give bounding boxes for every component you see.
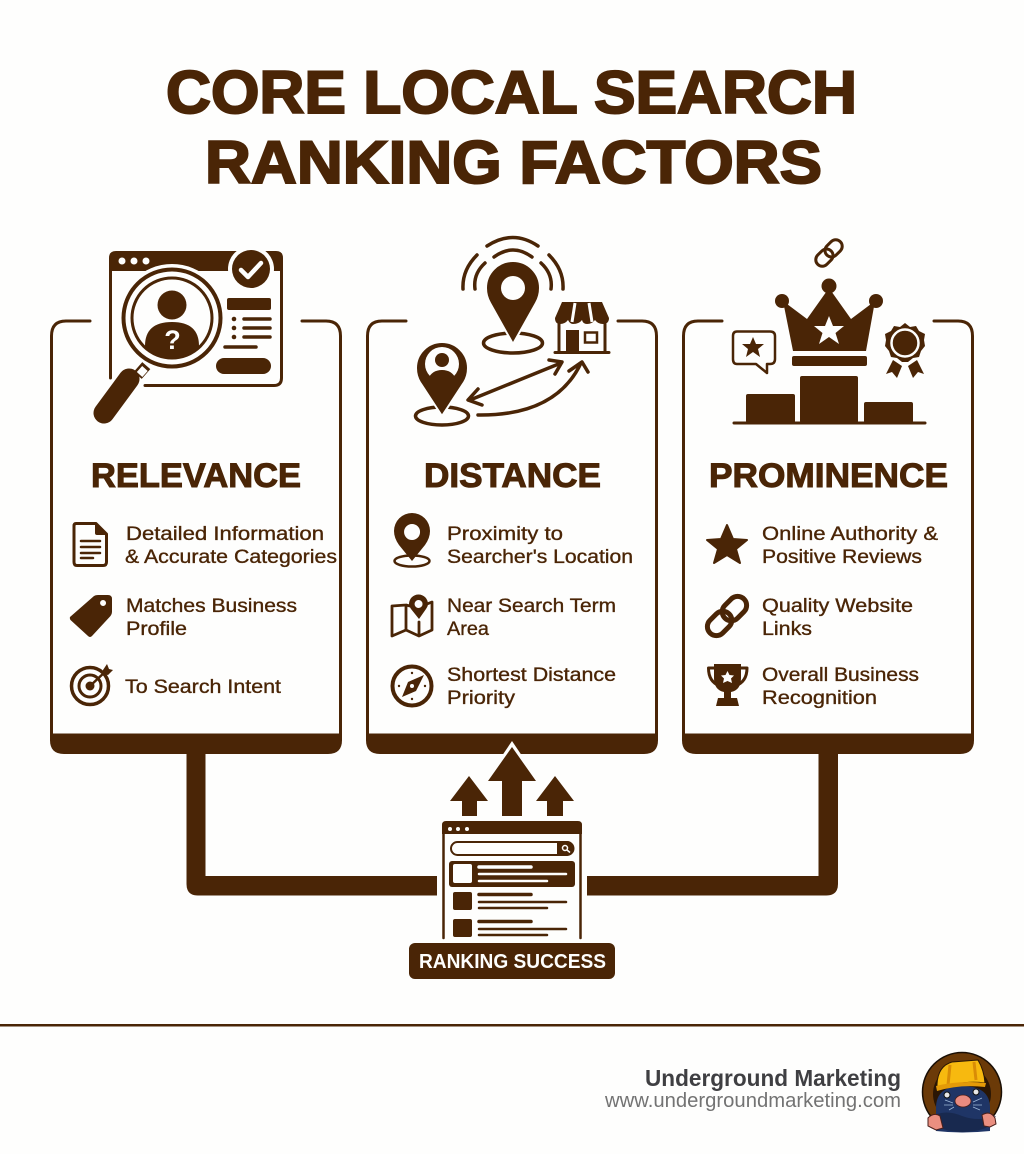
badge: ranking success: RANKING SUCCESS <box>419 951 606 973</box>
item: business recognition <box>708 664 919 709</box>
icon: mole mascot logo <box>922 1052 1002 1132</box>
item: matches business profile: Matches Business <box>126 595 297 617</box>
panel: prominence <box>682 237 974 754</box>
item: near search term <box>392 594 616 640</box>
item: proximity <box>394 513 633 568</box>
item: matches business profile <box>70 595 297 640</box>
icon: tag <box>70 595 112 637</box>
icon: map <box>392 594 432 636</box>
icon: compass <box>392 666 432 706</box>
item: detailed information <box>74 523 337 568</box>
item: search intent <box>72 664 282 704</box>
item: detailed information: Detailed Information <box>126 523 324 545</box>
heading: relevance: RELEVANCE <box>91 457 301 495</box>
item: near search term: Near Search Term <box>447 595 616 617</box>
card frame: prominence <box>682 321 974 754</box>
card frame: relevance <box>50 321 342 754</box>
title <box>166 59 857 196</box>
connector: right <box>587 750 838 896</box>
item: proximity: Searcher's Location <box>447 546 633 568</box>
item: quality links: Links <box>762 618 812 640</box>
icon: trophy <box>708 664 747 706</box>
heading: distance: DISTANCE <box>424 457 601 495</box>
item: near search term: Area <box>447 618 489 640</box>
title: CORE LOCAL SEARCH <box>166 59 857 126</box>
footer brand text: Underground Marketing <box>645 1065 901 1091</box>
icon: crown on podium <box>733 237 925 423</box>
panel: distance <box>366 238 658 754</box>
item: search intent: To Search Intent <box>125 676 282 698</box>
item: online authority: Online Authority & <box>762 523 938 545</box>
item: shortest distance: Shortest Distance <box>447 664 616 686</box>
icon: search results window <box>442 821 582 938</box>
item: shortest distance <box>392 664 616 709</box>
item: business recognition: Overall Business <box>762 664 919 686</box>
icon: star <box>707 525 747 563</box>
icon: location, store and routes <box>416 238 609 425</box>
icon: magnifier over profile window <box>104 246 283 413</box>
panel: relevance <box>50 246 342 754</box>
connector: left <box>186 750 437 896</box>
item: quality links <box>704 593 913 640</box>
item: quality links: Quality Website <box>762 595 913 617</box>
footer divider <box>0 1024 1024 1026</box>
card frame: distance <box>366 321 658 754</box>
icon: magnifier over profile window: ? <box>164 325 181 355</box>
heading: prominence: PROMINENCE <box>709 457 948 495</box>
icon: target <box>72 664 113 704</box>
item: matches business profile: Profile <box>126 618 187 640</box>
icon: pin <box>394 513 430 566</box>
item: business recognition: Recognition <box>762 687 877 709</box>
icon: upward arrows <box>450 741 574 816</box>
footer brand text: www.undergroundmarketing.com <box>604 1090 901 1112</box>
item: shortest distance: Priority <box>447 687 515 709</box>
icon: document <box>74 523 107 566</box>
title: RANKING FACTORS <box>205 129 822 196</box>
item: proximity: Proximity to <box>447 523 563 545</box>
footer brand text <box>604 1065 901 1112</box>
item: online authority <box>707 523 938 568</box>
icon: link <box>704 593 750 639</box>
item: detailed information: & Accurate Categories <box>125 546 337 568</box>
item: online authority: Positive Reviews <box>762 546 922 568</box>
badge: ranking success <box>409 943 615 979</box>
